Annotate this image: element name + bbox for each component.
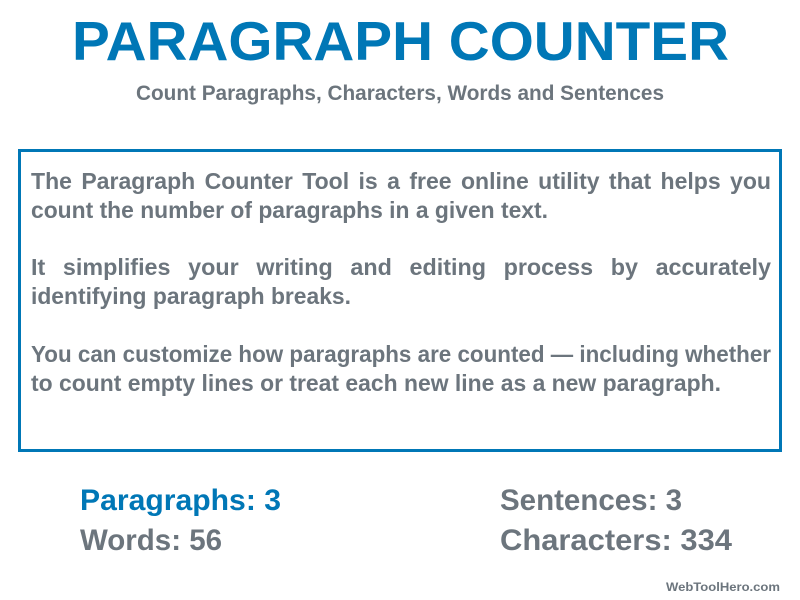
stat: characters: Characters: 334: [500, 524, 732, 557]
panel: description text box: [20, 150, 780, 450]
stat: words: Words: 56: [80, 524, 222, 557]
stat: paragraphs: Paragraphs: 3: [80, 484, 281, 517]
text block: paragraph 2: [31, 254, 771, 309]
title: PARAGRAPH COUNTER: [72, 10, 729, 72]
text block: paragraph 2: identifying paragraph breaks.: [31, 283, 351, 309]
text block: paragraph 1: [31, 168, 771, 223]
subtitle: Count Paragraphs, Characters, Words and Sentences: [136, 82, 664, 105]
text block: paragraph 3: You can customize how paragraphs are counted — including whether: [31, 341, 771, 367]
text block: paragraph 3: [31, 341, 771, 396]
stat: sentences: Sentences: 3: [500, 484, 682, 517]
text block: paragraph 3: to count empty lines or treat each new line as a new paragraph.: [31, 370, 721, 396]
text block: paragraph 1: The Paragraph Counter Tool is a free online utility that helps you: [31, 168, 771, 194]
text block: paragraph 2: It simplifies your writing and editing process by accurately: [31, 254, 771, 280]
text block: paragraph 1: count the number of paragraphs in a given text.: [31, 197, 548, 223]
footer: site credit: WebToolHero.com: [666, 580, 780, 594]
